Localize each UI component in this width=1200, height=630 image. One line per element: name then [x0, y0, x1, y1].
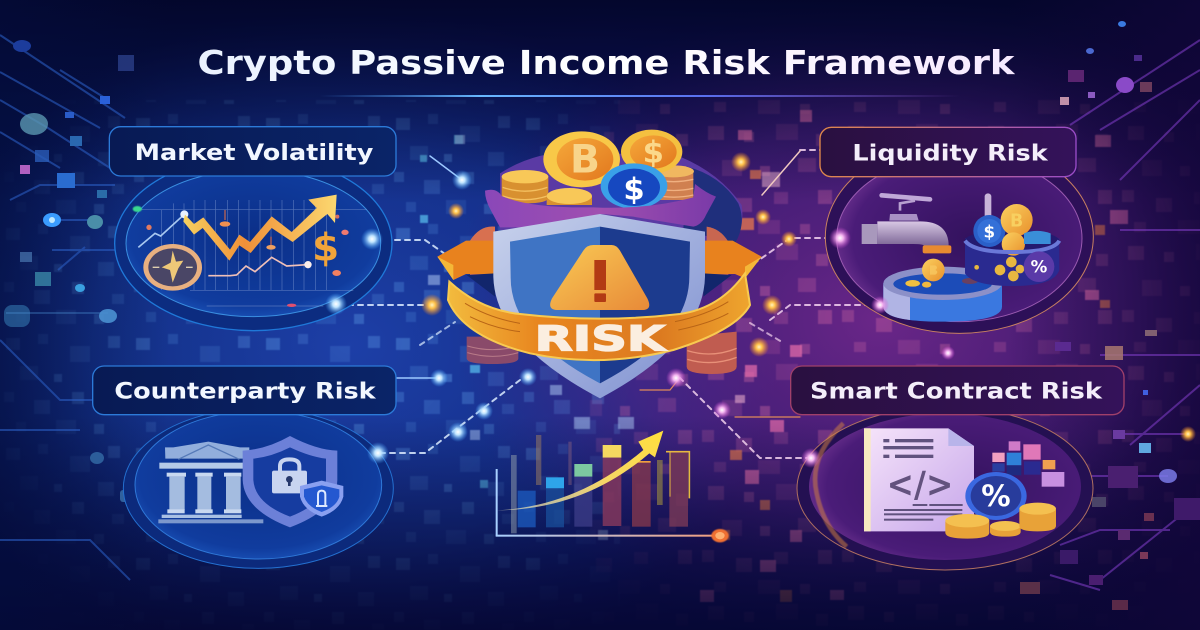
axes: [496, 469, 729, 542]
warning triangle: [550, 245, 649, 310]
label: Counterparty Risk: [114, 380, 377, 405]
title underline glow: [320, 95, 960, 97]
icon: percent coin: %: [981, 479, 1011, 513]
icon: faucet: [862, 195, 951, 253]
small stack: [547, 188, 592, 205]
dollar coin: $: [643, 136, 664, 171]
right circuit lines: [1050, 40, 1200, 590]
bitcoin coin: [543, 131, 620, 187]
compass coin: [143, 244, 202, 291]
label: Smart Contract Risk: [810, 380, 1104, 405]
sack rim: [485, 184, 716, 227]
icon: shield with padlock: [243, 436, 343, 527]
line chart with upward arrow: [133, 195, 367, 307]
left circuit lines: [0, 35, 130, 580]
right coin stack: [653, 165, 694, 200]
sack back: [500, 152, 742, 243]
icon: bucket with coins: B: [1010, 212, 1023, 232]
label: [791, 366, 1124, 415]
panel: market volatility: [109, 127, 396, 331]
icon: bucket with coins: [965, 193, 1059, 286]
blue coin: $: [623, 172, 645, 207]
disc: [123, 408, 393, 568]
disc: [825, 140, 1093, 333]
label: Market Volatility: [135, 141, 373, 166]
side cushions: [470, 227, 728, 277]
icon: gold coin stacks: [945, 503, 1056, 539]
ribbon band: [448, 273, 750, 360]
panel: smart contract risk: [791, 366, 1124, 570]
connector nodes: glowing dots: [325, 152, 955, 468]
ribbon tails: [437, 241, 762, 297]
right nodes: [1020, 21, 1200, 610]
panel: counterparty risk: [93, 366, 396, 568]
left nodes: [4, 40, 134, 502]
bottom coin stacks: [467, 332, 737, 374]
shield: [493, 214, 705, 398]
icon: bank building: [158, 442, 263, 523]
icon: code document: </>: [887, 465, 953, 506]
bitcoin coin: B: [570, 137, 600, 183]
icon: bucket with coins: %: [1031, 258, 1048, 277]
left coin stack: [502, 170, 548, 203]
disc: [115, 156, 392, 331]
dollar coin: [621, 130, 682, 174]
connectors: dashed network lines to centre: [338, 150, 880, 458]
panel: liquidity risk: [820, 127, 1093, 333]
bar chart with rising arrow: [496, 431, 729, 542]
label: [93, 366, 396, 415]
centre emblem: RISK shield: [437, 130, 762, 398]
bars: [511, 435, 689, 533]
label: [820, 127, 1076, 177]
icon: basin with coins: [883, 259, 1002, 322]
icon: data blocks: [992, 441, 1064, 487]
title: Crypto Passive Income Risk Framework: [198, 43, 1016, 82]
icon: bucket with coins: $: [984, 222, 995, 241]
arrow: [497, 431, 663, 510]
coins: [502, 130, 694, 209]
icon: percent coin: [965, 472, 1027, 520]
ribbon text: RISK: [535, 320, 667, 360]
blue coin: [601, 163, 667, 209]
label: [109, 127, 396, 176]
disc: [797, 407, 1093, 570]
dollar sign: $: [312, 226, 339, 271]
icon: code document: [864, 428, 974, 531]
label: Liquidity Risk: [852, 142, 1049, 167]
